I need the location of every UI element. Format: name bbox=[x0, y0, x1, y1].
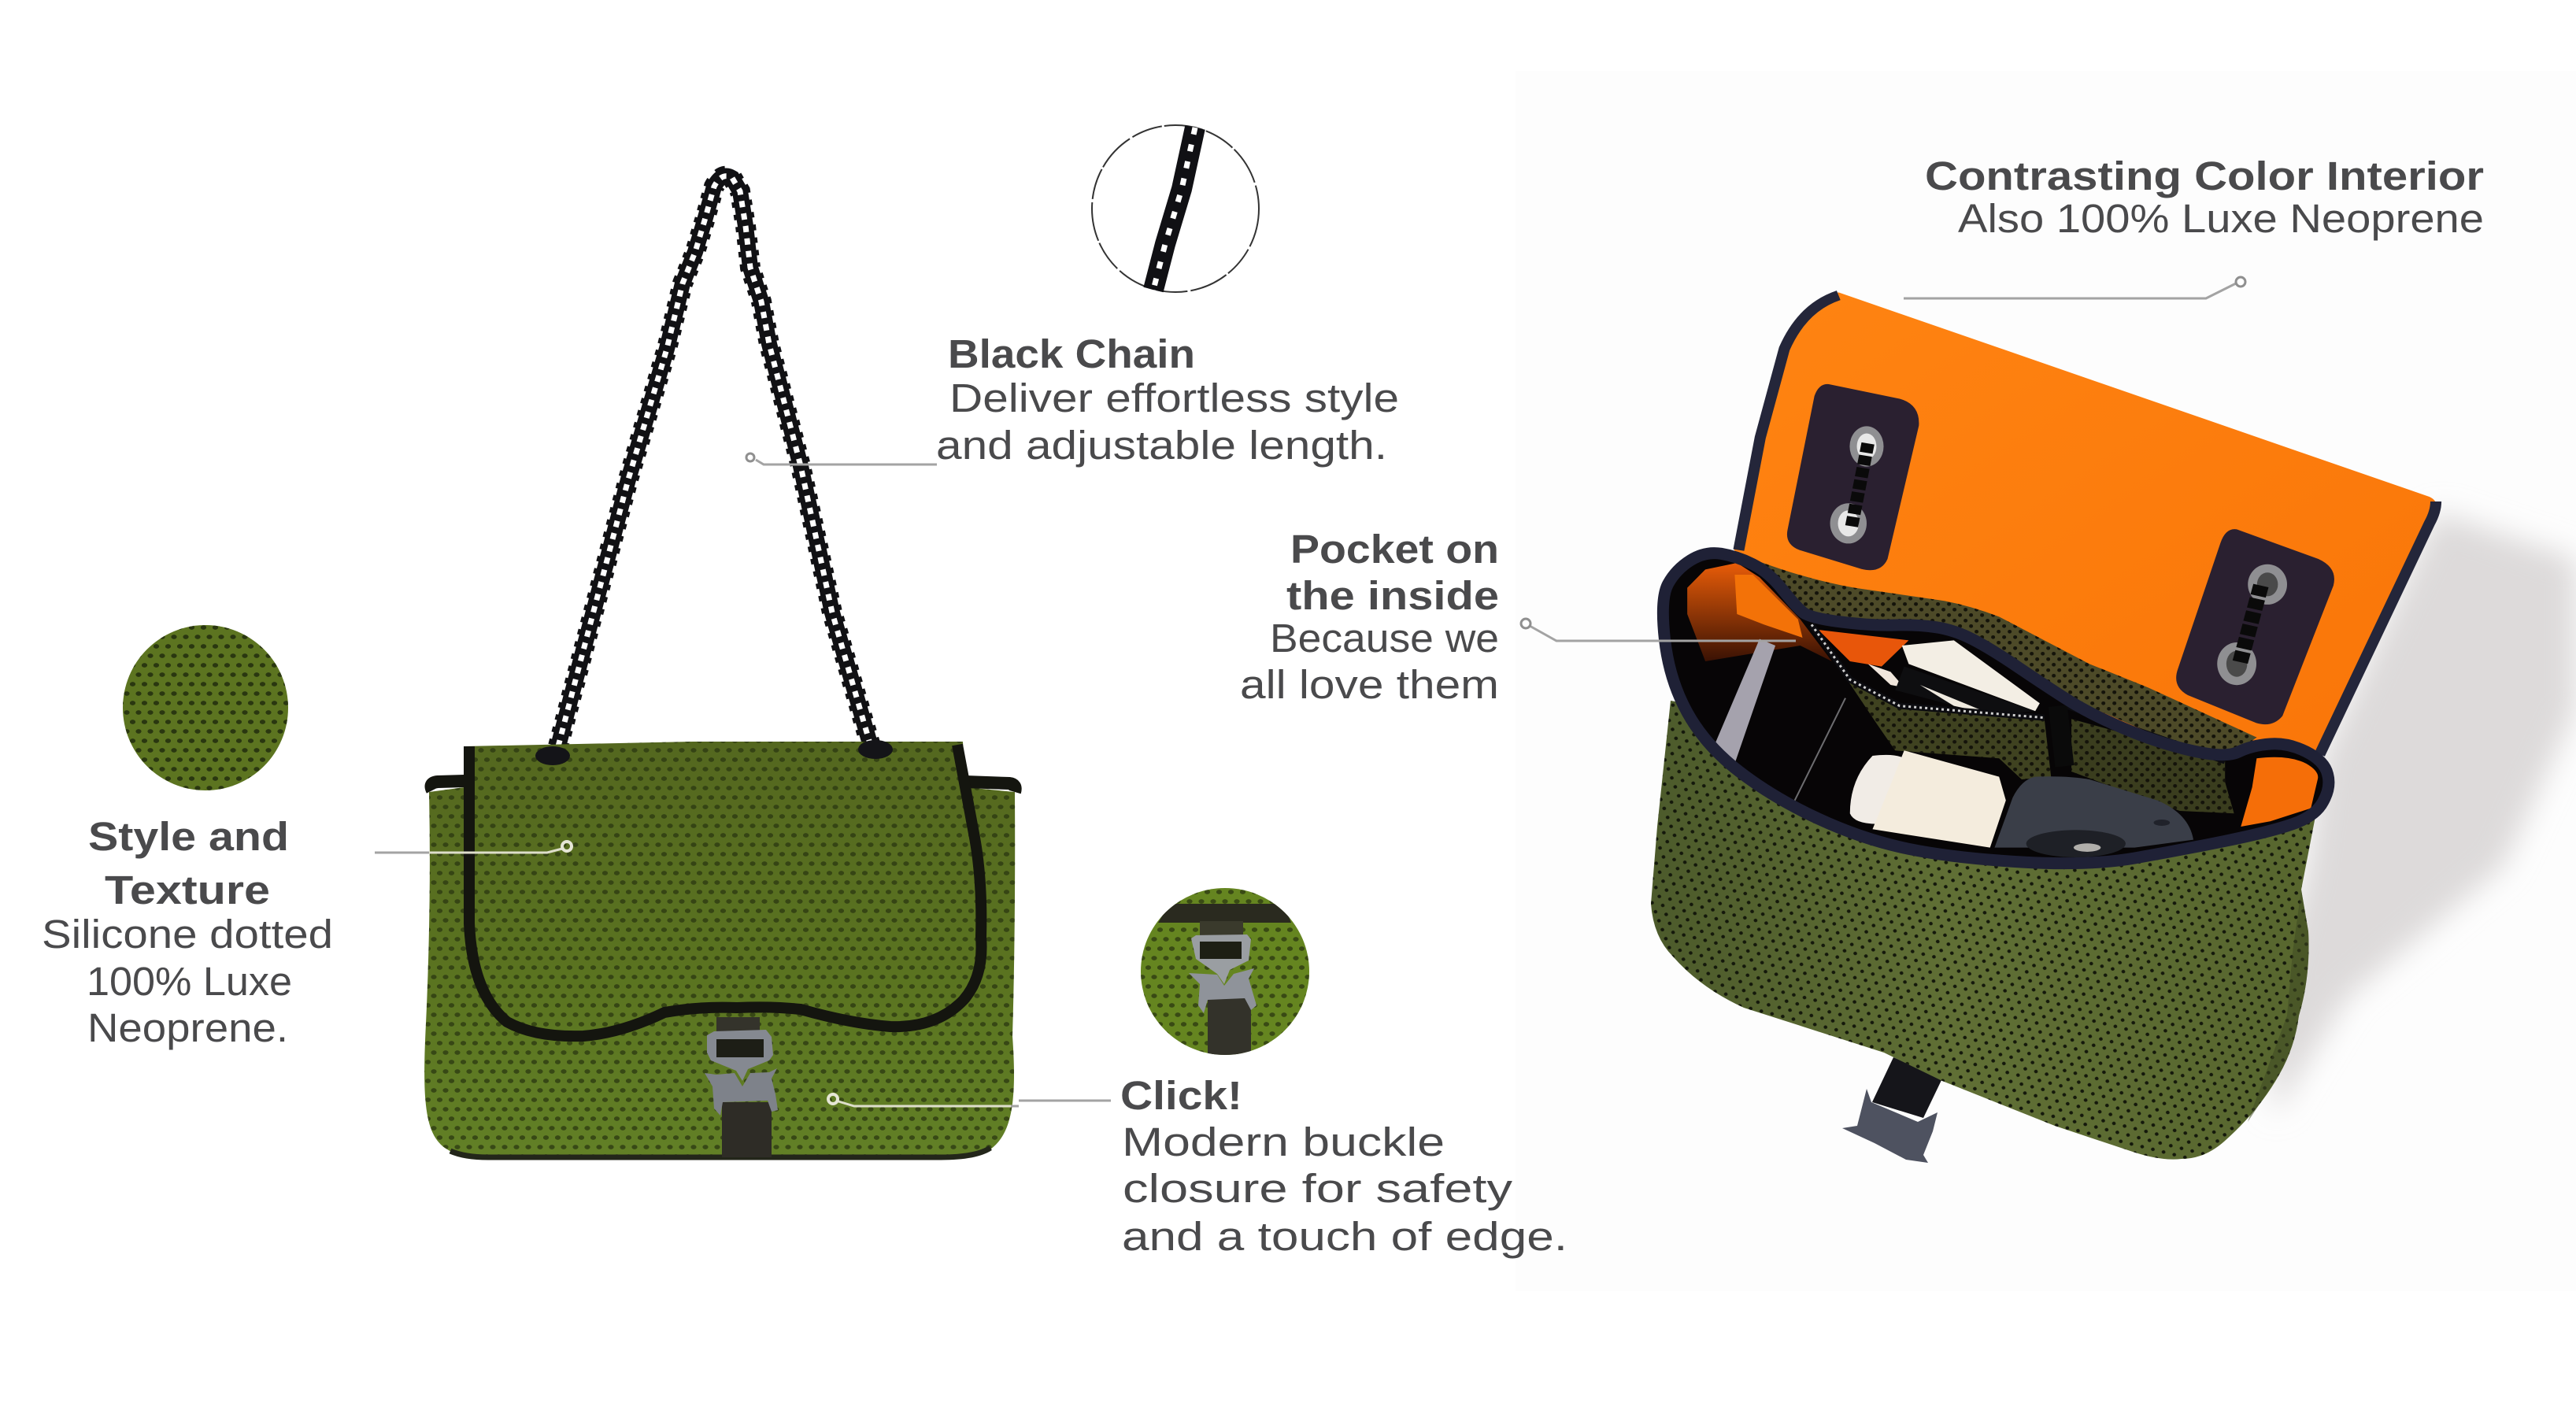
photo backdrop: right panel bbox=[1516, 71, 2576, 1291]
clear phone case bbox=[1715, 639, 1845, 803]
callout: pocket bbox=[1240, 527, 1499, 707]
flap: orange lining and pads bbox=[1734, 292, 2437, 769]
orange lining right bbox=[2241, 757, 2318, 827]
buckle bbox=[705, 1017, 778, 1157]
callout: contrasting interior bbox=[1925, 154, 2484, 241]
chain detail circle bbox=[1092, 125, 1259, 292]
flap pad left bbox=[1787, 384, 1919, 570]
chain strap bbox=[558, 176, 871, 746]
grey camera bbox=[1994, 776, 2193, 857]
bag body bbox=[1651, 701, 2315, 1160]
callout: pocket: all love them bbox=[1240, 662, 1499, 707]
flap piping bbox=[469, 745, 982, 1036]
callout: click bbox=[1120, 1073, 1567, 1259]
product photo: closed olive bag with chain bbox=[424, 176, 1016, 1160]
orange lining left bbox=[1687, 563, 1832, 661]
side seam panel bbox=[2248, 890, 2308, 1122]
leader: black chain bbox=[746, 453, 937, 464]
callout: pocket: Because we bbox=[1270, 616, 1499, 661]
cream cylinder bbox=[1850, 750, 2006, 848]
callout: click: closure for safety bbox=[1123, 1166, 1513, 1211]
infographic canvas bbox=[44, 124, 2576, 1258]
back mesh band above rim bbox=[1760, 561, 2256, 761]
leader: style and texture bbox=[375, 842, 572, 853]
callout: click: Click! bbox=[1120, 1073, 1242, 1118]
callout: contrasting interior: Contrasting Color Interior bbox=[1925, 154, 2484, 198]
callout: click: and a touch of edge. bbox=[1122, 1214, 1567, 1259]
product photo: open bag with orange interior bbox=[1651, 292, 2437, 1163]
bag bottom seam bbox=[450, 1148, 990, 1157]
callout: click: Modern buckle bbox=[1122, 1119, 1445, 1164]
callout: pocket: the inside bbox=[1286, 573, 1499, 618]
leader: pocket bbox=[1521, 619, 1796, 641]
callout: black chain: Deliver effortless style bbox=[949, 376, 1399, 420]
flap piping bbox=[1738, 295, 2436, 754]
pocket mesh right bbox=[2071, 719, 2234, 813]
white notebook bbox=[1902, 640, 2040, 711]
callout: black chain: and adjustable length. bbox=[936, 423, 1387, 468]
bag body bbox=[424, 742, 1015, 1160]
interior opening bbox=[1663, 553, 2329, 864]
leader: contrasting interior bbox=[1904, 277, 2245, 298]
buckle detail circle bbox=[1138, 885, 1314, 1060]
flap pad right bbox=[2176, 529, 2334, 724]
cast shadow of open bag bbox=[2267, 512, 2576, 1116]
callout: black chain: Black Chain bbox=[948, 331, 1195, 376]
callout: style and texture: 100% Luxe bbox=[87, 959, 292, 1004]
callout: contrasting interior: Also 100% Luxe Neoprene bbox=[1958, 196, 2484, 241]
side tab piping bbox=[431, 781, 1016, 792]
bottom buckle bbox=[1842, 1057, 1942, 1163]
callout: black chain bbox=[936, 331, 1399, 468]
texture swatch circle bbox=[118, 622, 291, 795]
zipper bbox=[1812, 624, 2225, 766]
rim piping bbox=[1663, 553, 2329, 864]
callout: pocket: Pocket on bbox=[1290, 527, 1499, 572]
pocket mesh left bbox=[1845, 677, 2051, 779]
black organiser bbox=[1895, 667, 2035, 715]
callout: style and texture bbox=[42, 814, 333, 1050]
callout: style and texture: Texture bbox=[105, 868, 270, 912]
eyelets bbox=[535, 740, 893, 765]
callout: style and texture: Neoprene. bbox=[87, 1005, 288, 1050]
leader: click buckle bbox=[828, 1094, 1111, 1106]
callout: style and texture: Style and bbox=[88, 814, 289, 859]
interior bbox=[1663, 553, 2329, 864]
callout: style and texture: Silicone dotted bbox=[42, 912, 333, 957]
pocket orange bbox=[1819, 630, 1908, 667]
